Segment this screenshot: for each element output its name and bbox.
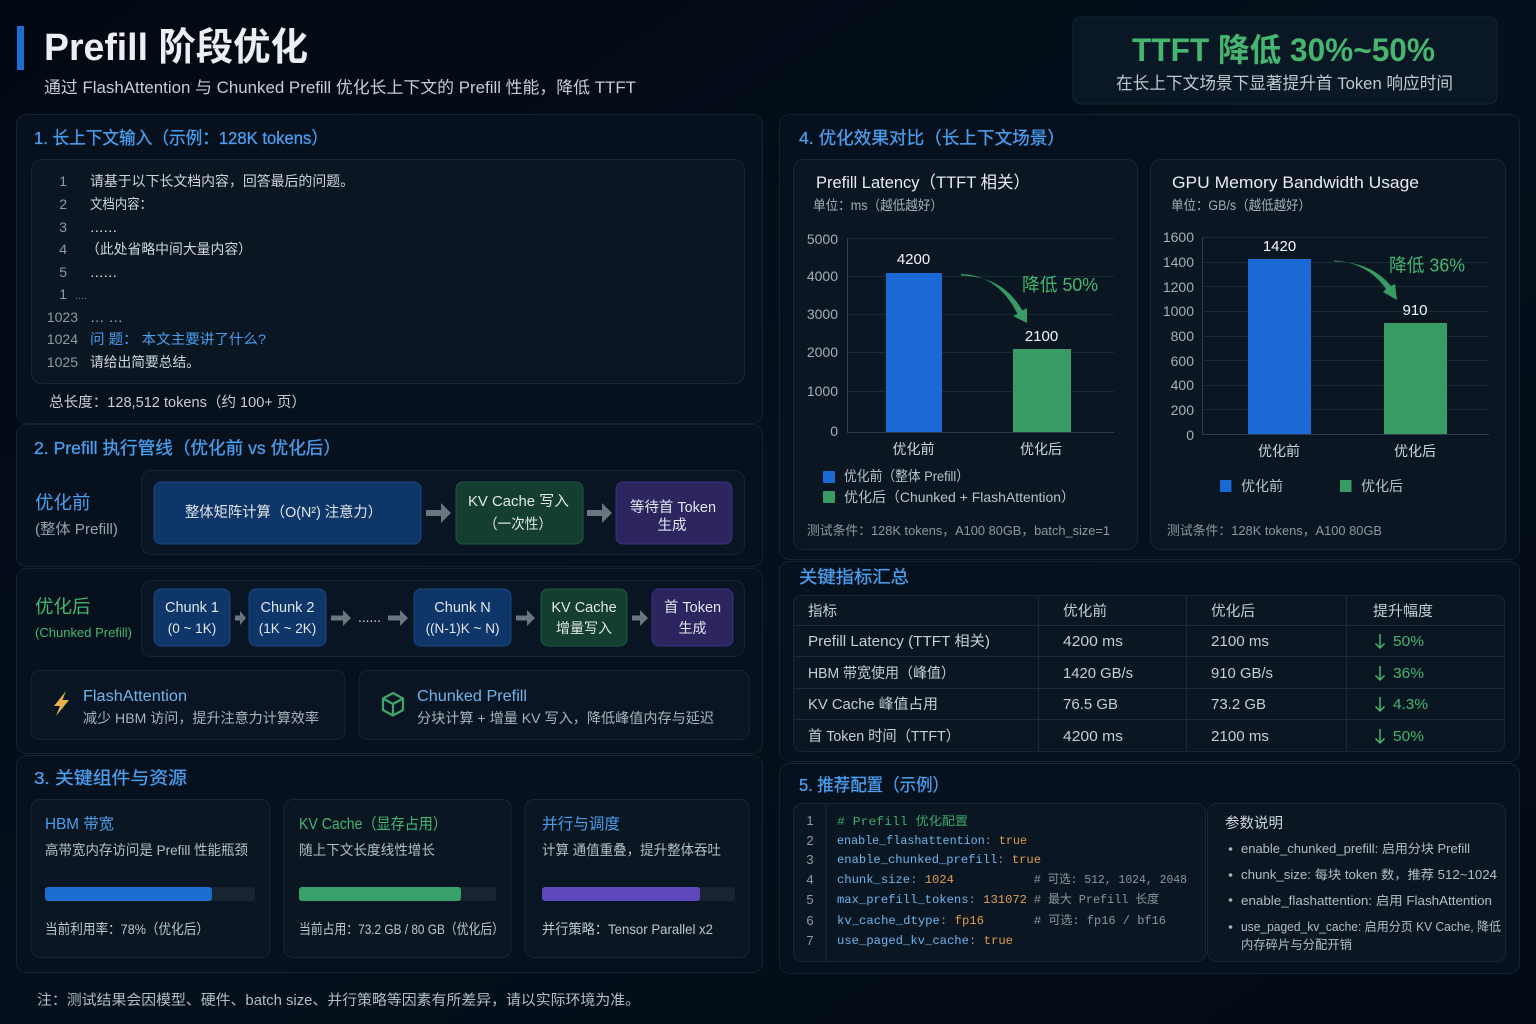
card: KV Cache: 当前占用：73.2 GB / 80 GB（优化后） [299,921,504,937]
bar: before 4200: 4200 [897,251,930,268]
step: chunk 2: Chunk 2 [260,600,315,616]
line numbers: 7 [806,933,814,948]
step: KV cache write: （一次性） [484,516,552,533]
arrow [235,611,246,625]
step: chunk 1: Chunk 1 [165,600,219,616]
code block: enable_chunked_prefill: true [837,853,1041,867]
card: FlashAttention [31,670,345,740]
step: whole matrix: 整体矩阵计算（O(N²) 注意力） [185,503,382,521]
card: parallel [525,800,749,958]
row: prefill latency [808,633,1424,650]
y axis labels: 200 [1171,402,1194,418]
step: chunk 1: (0 ~ 1K) [168,621,216,636]
card: FlashAttention: FlashAttention [83,688,187,705]
bar: after 910: 910 [1402,302,1428,319]
line numbers: 2 [806,833,814,848]
y axis labels: 400 [1171,377,1194,393]
legend: 优化前（整体 Prefill） [844,468,969,484]
legend: 优化后 [1361,478,1403,494]
code listing: … … [90,309,123,325]
code listing: 请基于以下长文档内容，回答最后的问题。 [90,173,354,189]
card: HBM: 高带宽内存访问是 Prefill 性能瓶颈 [45,842,248,858]
panel: key components [16,756,762,972]
panel: pipeline before [16,424,762,566]
y axis labels: 1200 [1163,279,1194,295]
row: KV cache peak: 73.2 GB [1211,697,1266,713]
chart: prefill latency: Prefill Latency（TTFT 相关） [816,173,1030,192]
header row: 指标 [808,603,837,620]
card: parallel: 并行策略：Tensor Parallel x2 [542,921,713,937]
parameter notes: enable_chunked_prefill: 启用分块 Prefill [1241,842,1470,856]
row: KV cache peak: 4.3% [1393,697,1428,713]
parameter notes [1208,804,1506,962]
code listing: 1 [59,173,67,189]
heading: summary: 关键指标汇总 [799,567,909,587]
bar: before 1420: 1420 [1263,238,1296,255]
legend: 优化前 [1241,478,1283,494]
line numbers: 5 [806,892,814,907]
arrow [426,503,451,523]
chart: memory bandwidth: GPU Memory Bandwidth Usage [1172,173,1419,192]
panel: optimization comparison [780,114,1520,560]
card: Chunked Prefill: 分块计算 + 增量 KV 写入，降低峰值内存与延迟 [417,710,714,726]
arrow: reduction [1334,260,1397,300]
row: first token time [808,728,1424,745]
callout: TTFT reduction: TTFT 降低 30%~50% [1132,32,1435,68]
total length note: 总长度：128,512 tokens（约 100+ 页） [49,394,306,411]
label: chunked prefill: (Chunked Prefill) [35,625,132,640]
code listing: 问 题： 本文主要讲了什么? [90,331,266,347]
header: title block [17,26,636,97]
row: first token time: 50% [1393,729,1424,745]
parameter notes: 参数说明 [1225,815,1283,832]
accent bar [17,26,24,70]
row: HBM bandwidth: HBM 带宽使用（峰值） [808,665,955,682]
step: KV cache write [456,482,583,544]
row: HBM bandwidth: 1420 GB/s [1063,666,1133,682]
step: KV cache incremental: 增量写入 [556,620,612,636]
code block: # 最大 Prefill 长度 [1034,891,1159,907]
chart: memory bandwidth: 单位：GB/s（越低越好） [1171,198,1311,213]
y axis labels: 1600 [1163,229,1194,245]
table [794,596,1504,752]
footnote: 注：测试结果会因模型、硬件、batch size、并行策略等因素有所差异，请以实际环境为准。 [37,991,640,1009]
label: after: 优化后 [35,596,91,617]
panel: pipeline after [16,568,762,754]
y axis labels [807,231,838,439]
step: chunk N: ((N-1)K ~ N) [426,621,499,636]
code block [794,804,1206,962]
category labels: 优化后 [1020,441,1062,457]
code listing: 3 [59,219,67,235]
label: reduce 36%: 降低 36% [1389,256,1465,276]
row: KV cache peak: 76.5 GB [1063,697,1118,713]
parameter notes: 内存碎片与分配开销 [1241,937,1352,952]
y axis labels: 600 [1171,353,1194,369]
header row [808,603,1433,620]
panel: long context input [16,114,762,424]
card: HBM: HBM 带宽 [45,815,114,833]
step: chunk N [414,589,511,646]
code listing: （此处省略中间大量内容） [86,241,252,257]
heading 3: 3. 关键组件与资源 [34,768,187,788]
category labels: 优化后 [1394,443,1436,459]
code block: # 可选: fp16 / bf16 [1034,913,1166,928]
code listing: ...... [90,219,117,235]
grid and axis [847,238,1114,433]
heading 4: 4. 优化效果对比（长上下文场景） [799,128,1065,148]
card: Chunked Prefill: Chunked Prefill [417,688,527,705]
grid and axis [1202,237,1489,435]
y axis labels: 5000 [807,231,838,247]
category labels: 优化前 [892,441,934,457]
parameter notes: chunk_size: 每块 token 数，推荐 512~1024 [1241,867,1497,882]
code block: max_prefill_tokens: 131072 [837,893,1027,907]
line numbers: 4 [806,872,814,887]
y axis labels: 3000 [807,306,838,322]
code listing: 1023 [47,309,78,325]
heading 2: 2. Prefill 执行管线（优化前 vs 优化后） [34,438,341,458]
code listing: 1025 [47,354,78,370]
arrow [331,610,351,626]
code listing [32,160,744,384]
y axis labels: 0 [1186,427,1194,443]
callout: TTFT reduction [1073,17,1497,104]
chart: prefill latency [794,160,1138,550]
step: whole matrix [154,482,421,544]
y axis labels: 1400 [1163,254,1194,270]
row: HBM bandwidth [808,665,1424,682]
arrow [388,610,408,626]
bar: before 4200 [886,251,942,432]
card: KV Cache: 随上下文长度线性增长 [299,842,435,858]
heading 5: 5. 推荐配置（示例） [799,775,949,795]
bar: before 1420 [1248,238,1311,434]
step: first token: 生成 [678,620,706,636]
code listing: 文档内容： [90,196,152,212]
card: Chunked Prefill [359,670,749,740]
icon: lightning [54,691,69,716]
test conditions: 测试条件：128K tokens，A100 80GB [1167,523,1382,538]
label: whole prefill: (整体 Prefill) [35,521,118,538]
arrow [632,610,648,626]
step: chunk N: Chunk N [434,600,491,616]
code block: # Prefill 优化配置 [837,814,968,829]
category labels [1258,443,1436,459]
category labels [892,441,1062,457]
card: HBM [31,800,270,958]
step: chunk 2: (1K ~ 2K) [259,621,316,636]
step: first token: 首 Token [664,599,721,616]
line numbers: 6 [806,913,814,928]
row: KV cache peak [808,696,1428,713]
step: KV cache write: KV Cache 写入 [468,494,569,510]
arrow [516,610,535,626]
step: wait first token [616,482,732,544]
step: wait first token: 生成 [658,517,686,534]
line numbers: 3 [806,852,814,867]
y axis labels: 1000 [1163,303,1194,319]
row: HBM bandwidth: 910 GB/s [1211,666,1273,682]
code block: use_paged_kv_cache: true [837,934,1013,948]
category labels: 优化前 [1258,443,1300,459]
code listing: 5 [59,264,67,280]
legend: 优化后（Chunked + FlashAttention） [844,489,1075,505]
flow strip after [142,580,744,656]
y axis labels: 800 [1171,328,1194,344]
code listing: 1024 [47,331,78,347]
row: KV cache peak: KV Cache 峰值占用 [808,696,938,713]
step: KV cache incremental [541,589,627,646]
y axis labels: 1000 [807,383,838,399]
card: FlashAttention: 减少 HBM 访问，提升注意力计算效率 [83,710,319,726]
step: wait first token: 等待首 Token [630,498,716,516]
row: prefill latency: 50% [1393,634,1424,650]
label: reduce 50%: 降低 50% [1022,275,1098,295]
bar: after 2100 [1013,328,1071,432]
code listing: 请给出简要总结。 [90,354,200,370]
chart: prefill latency: 单位：ms（越低越好） [813,198,943,213]
row: prefill latency: Prefill Latency (TTFT 相关) [808,633,990,650]
code listing: .... [75,290,87,302]
line numbers [806,813,814,948]
card: KV Cache [284,800,511,958]
row: prefill latency: 2100 ms [1211,634,1269,650]
bar: after 910 [1384,302,1447,434]
title: Prefill 阶段优化 [44,27,308,69]
y axis labels [1163,229,1194,443]
parameter notes: enable_flashattention: 启用 FlashAttention [1241,894,1492,908]
label: before: 优化前 [35,492,91,513]
code block: enable_flashattention: true [837,834,1027,848]
bar: after 2100: 2100 [1025,328,1058,345]
card: HBM: 当前利用率：78%（优化后） [45,921,209,937]
y axis labels: 0 [830,423,838,439]
code listing: 1 [59,286,67,302]
code listing: ...... [90,264,117,280]
panel: recommended config [780,764,1520,974]
step: chunk 2 [249,589,326,646]
heading 1: 1. 长上下文输入（示例：128K tokens） [34,128,328,148]
header row: 提升幅度 [1373,603,1433,620]
callout: TTFT reduction: 在长上下文场景下显著提升首 Token 响应时间 [1116,74,1453,93]
header row: 优化后 [1211,603,1255,620]
card: KV Cache: KV Cache（显存占用） [299,815,447,833]
code block: # 可选: 512, 1024, 2048 [1034,872,1187,887]
test conditions: 测试条件：128K tokens，A100 80GB，batch_size=1 [807,523,1110,538]
icon: cube [383,693,403,716]
parameter notes: use_paged_kv_cache: 启用分页 KV Cache, 降低 [1241,920,1501,934]
panel: metric summary [780,562,1520,762]
line numbers: 1 [806,813,814,828]
row: prefill latency: 4200 ms [1063,634,1123,650]
legend [823,468,1075,505]
code block: kv_cache_dtype: fp16 [837,914,984,928]
card: parallel: 并行与调度 [542,815,620,833]
y axis labels: 2000 [807,344,838,360]
arrow [587,503,612,523]
step: KV cache incremental: KV Cache [551,600,617,616]
header row: 优化前 [1063,603,1107,620]
subtitle: 通过 FlashAttention 与 Chunked Prefill 优化长上下文的 Prefill 性能，降低 TTFT [44,78,636,97]
y axis labels: 4000 [807,268,838,284]
code block: chunk_size: 1024 [837,873,954,887]
step: chunk 1 [154,589,230,646]
ellipsis: ...... [358,610,381,626]
progress bar: 78% [45,887,255,901]
row: first token time: 首 Token 时间（TTFT） [808,728,960,745]
chart: memory bandwidth [1150,160,1506,550]
row: HBM bandwidth: 36% [1393,666,1424,682]
card: parallel: 计算 通值重叠，提升整体吞吐 [542,842,721,858]
legend [1220,478,1403,494]
row: first token time: 2100 ms [1211,729,1269,745]
progress bar: KV cache [299,887,496,901]
code listing: 4 [59,241,67,257]
code listing: 2 [59,196,67,212]
row: first token time: 4200 ms [1063,729,1123,745]
progress bar: parallel [542,887,735,901]
arrow: reduction [961,274,1027,323]
flow strip before [142,470,744,554]
step: first token [652,589,733,646]
